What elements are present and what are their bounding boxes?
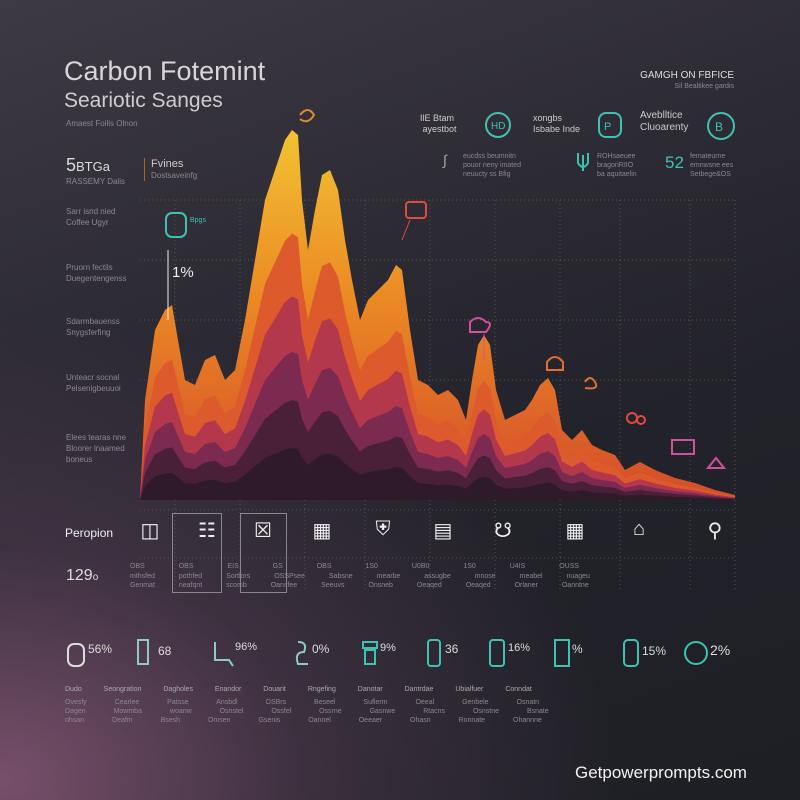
text: Elees tearas nne <box>66 433 126 442</box>
main area chart <box>140 109 736 589</box>
bottom stat row: 0% <box>312 642 329 656</box>
bottom stat row: 68 <box>158 644 171 658</box>
text: Sdarmbauenss <box>66 317 120 326</box>
left axis labels <box>66 207 115 227</box>
top right icon row: Aveblltice <box>640 110 683 121</box>
top right icon row: neuucty ss Bfig <box>463 171 510 178</box>
highlighted boxes <box>172 513 222 593</box>
bottom stat row: Ovesfy Cearlee Patsse Ansbdl OSBrs Beseel Suflerm Oeeal Genbele Osnatn <box>65 699 539 706</box>
chart callouts <box>166 110 724 468</box>
top right icon row: Isbabe Inde <box>533 124 580 134</box>
icon row: categories: ☋ <box>494 520 512 542</box>
icon row: categories: ▤ <box>434 520 452 542</box>
top right icon row: P <box>604 121 611 133</box>
top right icon row: 52 <box>665 153 684 172</box>
icon row: categories: mthsfed pothfed Sortlors OSSPsee Sabsne mearbe assugbe mnose meabel nuageu <box>130 573 590 580</box>
icon row: categories: OBS OBS EIS GS OBS 1S0 U0B0 1S0 U4IS OUSS <box>130 563 579 570</box>
icon row: categories: ☷ <box>198 520 216 542</box>
text: Pelsenigbeuuoi <box>66 384 121 393</box>
top right icon row: eucdss beumnitn <box>463 153 516 160</box>
bottom stat row: 9% <box>380 642 396 654</box>
text: Snygsferfing <box>66 328 110 337</box>
right header: GAMGH ON FBFICE <box>640 70 734 81</box>
stat: 5BTGa <box>66 155 125 186</box>
icon row: categories: ⛨ <box>376 518 390 540</box>
title: Carbon Fotemint <box>64 56 265 86</box>
top right icon row: ∫ <box>443 152 447 168</box>
icon row: categories <box>130 518 722 589</box>
stat: 5BTGa: 5BTGa <box>66 155 110 175</box>
left axis labels: Coffee Ugyr <box>66 218 109 227</box>
bottom stat row: 16% <box>508 642 530 654</box>
text: Unteacr socnal <box>66 373 119 382</box>
bottom stat row: 96% <box>235 641 257 653</box>
caption: Amaest Foilis Olnon <box>66 119 138 128</box>
main area chart: Bpgs <box>190 217 206 224</box>
bottom stat row: Dudo Seongration Dagholes Enandor Douarit Rngefing Danotar Dantrdae Ubialfuer Conndat <box>65 686 532 693</box>
top right icon row: emnwsne ees <box>690 162 733 169</box>
top right icon row: ayestbot <box>422 124 457 134</box>
stat: Fvines <box>144 158 197 181</box>
text: boneus <box>66 455 92 464</box>
icon row: categories: ☒ <box>254 520 272 542</box>
main area chart: 1% <box>172 264 194 281</box>
icon row: categories: ◫ <box>141 520 159 542</box>
top right icon row: HD <box>491 121 505 132</box>
icon row: categories: ⚲ <box>708 520 722 542</box>
top right icon row: pouor neny imated <box>463 162 521 169</box>
icon row: categories: ▦ <box>313 520 331 542</box>
row stat: 129: 129o <box>66 567 98 584</box>
stat: 5BTGa: RASSEMY Dalis <box>66 177 125 186</box>
icon row: categories: ⌂ <box>633 518 645 540</box>
top right icon row: xongbs <box>533 113 562 123</box>
bottom stat row: ohsan Deafm Bsesh Omsen Gsenis Oannel Oeeaer Ohasn Ronnate Ohannne <box>65 717 542 724</box>
icon row: categories: ▦ <box>566 520 584 542</box>
bottom stat row: % <box>572 642 583 656</box>
top right icon row: ba aquitaelin <box>597 171 637 178</box>
bottom stat row: 2% <box>710 642 730 658</box>
subtitle: Seariotic Sanges <box>64 89 223 112</box>
left axis labels: Sarr isnd nied <box>66 207 115 216</box>
icon row: categories: Genmat neafqnt scomb Oansfee Seeuvs Onsneb Oeaqed Oeaqed Orlaner Oanntne <box>130 582 589 589</box>
top right icon row: ROHsaeuee <box>597 153 636 160</box>
bottom stat row: 56% <box>88 642 112 656</box>
right header: Sil Bealtikee gardis <box>674 83 734 90</box>
bottom stat row: Dagen Mowmba woanw Osnstel Ossfel Ossrne Gasnwe Rtacns Osnstne Bsnate <box>65 708 549 715</box>
text: Pruorn fectils <box>66 263 113 272</box>
stat: Fvines: Fvines <box>151 158 183 170</box>
top right icon row: bragoriRIIO <box>597 162 633 169</box>
stat: Fvines: Dostsaveinfg <box>151 171 197 180</box>
text: Bloorer lnaamed <box>66 444 125 453</box>
row label: Peropion: Peropion <box>65 526 113 540</box>
right header <box>640 70 734 90</box>
top right icon row: IlE Btam <box>420 113 454 123</box>
bottom stat row: 36 <box>445 642 458 656</box>
text: Duegentengenss <box>66 274 126 283</box>
top right icon row: femateurne <box>690 153 725 160</box>
watermark: Getpowerprompts.com <box>575 763 747 782</box>
top right icon row <box>420 110 735 178</box>
top right icon row: Cluoarenty <box>640 122 688 133</box>
bottom stat row <box>65 639 730 724</box>
top right icon row: Setbege&OS <box>690 171 731 178</box>
bottom stat row: 15% <box>642 644 666 658</box>
top right icon row: B <box>715 120 723 134</box>
